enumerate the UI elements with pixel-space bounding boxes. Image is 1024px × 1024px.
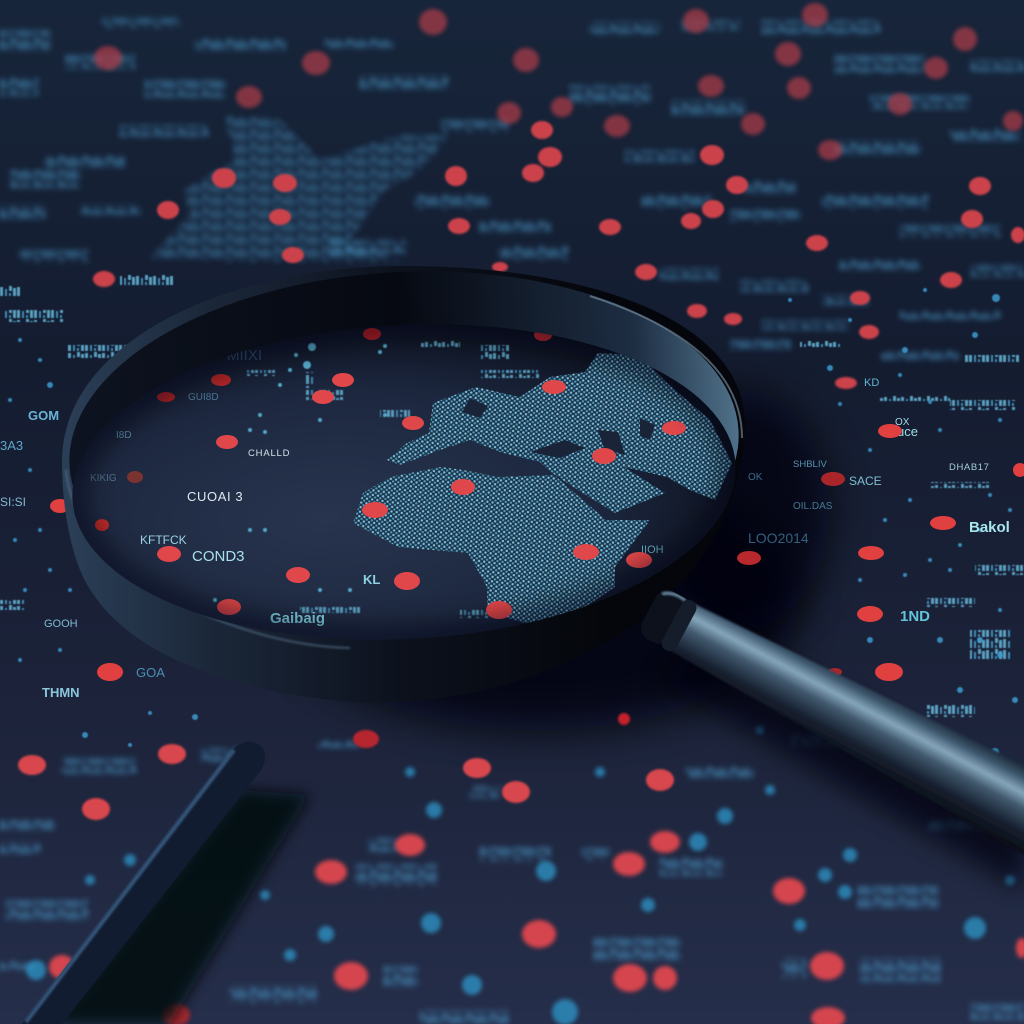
shadow: magnifier cast shadow xyxy=(280,390,1024,890)
lens labels: KIKIG xyxy=(90,473,117,484)
lens labels: KL xyxy=(363,572,380,587)
magnifier rim, inner wall xyxy=(60,255,748,641)
background: blue dots xyxy=(8,288,1018,756)
icon: second stick, lower left xyxy=(22,741,265,1024)
map: Europe and Asia in dots xyxy=(387,353,732,513)
magnifier rim, front wall xyxy=(62,266,745,702)
background: blurred lower labels and dots xyxy=(0,735,1024,1024)
background: red location markers, far and blurred xyxy=(94,3,1023,160)
magnifier handle xyxy=(629,572,1024,876)
lens labels: CHALLD xyxy=(248,448,290,459)
background: blurred blue text labels, top area xyxy=(0,18,1024,360)
magnifier rim highlight on the far right xyxy=(590,296,742,438)
map: scattered dots xyxy=(178,340,540,618)
background: blue scatter labels, sides xyxy=(0,275,1023,717)
background: labels near the glass: SI:SI xyxy=(0,495,26,509)
lens labels: COND3 xyxy=(192,548,245,565)
background: labels near the glass: THMN xyxy=(42,685,80,700)
magnifier lens rim highlight xyxy=(66,470,350,648)
lens contents xyxy=(72,325,735,640)
background: labels near the glass: SHBLIV xyxy=(793,459,827,470)
background: labels near the glass: GOOH xyxy=(44,618,78,630)
lens labels: MIIXI xyxy=(227,347,262,364)
background: labels near the glass: KD xyxy=(864,377,879,389)
background: labels near the glass: DHAB17 xyxy=(949,462,990,473)
lens labels: CUOAI 3 xyxy=(187,489,243,504)
lens labels: GUI8D xyxy=(188,392,219,403)
background: labels near the glass: 3A3 xyxy=(0,438,23,453)
icon: magnifying glass xyxy=(60,255,1024,876)
background: labels near the glass: SACE xyxy=(849,474,882,488)
lens location markers xyxy=(95,328,686,619)
background: labels near the glass: LOO2014 xyxy=(748,530,809,546)
background: labels near the glass: OK xyxy=(748,472,763,483)
lens labels: IIOH xyxy=(641,544,664,556)
background: labels near the glass: uce xyxy=(897,424,918,439)
lens labels: I8D xyxy=(116,430,132,441)
shadow: lower left stick shadow xyxy=(50,790,310,1024)
background: labels near the glass: OIL.DAS xyxy=(793,501,833,512)
lens edge vignette xyxy=(72,325,735,640)
background: labels near the glass: Bakol xyxy=(969,519,1010,536)
magnifier lens surface xyxy=(64,308,744,656)
lens labels: KFTFCK xyxy=(140,533,187,547)
map: Africa in dots xyxy=(353,467,650,630)
background: labels near the glass: GOA xyxy=(136,665,165,680)
lens labels xyxy=(90,347,664,627)
background: near red location markers xyxy=(50,424,1024,681)
background: labels near the glass: 1ND xyxy=(900,608,930,625)
background: labels near the glass: GOM xyxy=(28,408,59,423)
map: inland water gaps xyxy=(462,398,655,458)
background: blurred continent at top left xyxy=(150,115,450,262)
background: labels near the glass xyxy=(0,377,1010,700)
lens labels: Gaibaig xyxy=(270,610,325,627)
background: labels near the glass: OX xyxy=(895,417,910,428)
